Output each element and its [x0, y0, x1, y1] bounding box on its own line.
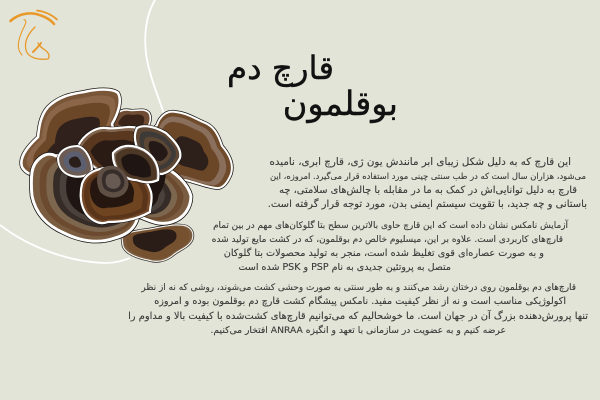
mushroom: bottom lobe [122, 225, 193, 261]
text block: cultivation: تنها پرورش‌دهنده بزرگ آن در جهان است. ما خوشحالیم که می‌توانیم قارچ‌های کشت‌شده با کیفیت بالا و مداوم را [128, 311, 588, 322]
text block: cultivation [128, 283, 588, 336]
title line 1: قارچ دم [227, 49, 334, 87]
text block: cultivation: اکولوژیکی مناسب است و نه از نظر کیفیت مفید. نامکس پیشگام کشت قارچ دم بوقلمون بوده و امروزه [154, 296, 566, 307]
text block: cultivation: قارچ‌های دم بوقلمون روی درختان رشد می‌کنند و به طور سنتی به صورت وحشی کشت می‌شوند، روشی که نه از نظر [141, 283, 576, 293]
text block: cultivation: عرضه کنیم و به عضویت در سازمانی با تعهد و انگیزه ANRAA افتخار می‌کنیم. [211, 325, 506, 336]
text block: introduction [268, 156, 587, 210]
text block: research: قارچ‌های کاربردی است. علاوه بر این، میسلیوم خالص دم بوقلمون، که در کشت مایع تولید شده [212, 235, 563, 245]
mushroom: right lobe [148, 112, 232, 188]
mushroom: upper left lobe [21, 90, 120, 178]
text block: research: آزمایش نامکس نشان داده است که این قارچ حاوی بالاترین سطح بتا گلوکان‌های مهم در بین تمام [213, 221, 568, 231]
text block: introduction: می‌شود، هزاران سال است که در طب سنتی چینی مورد استفاده قرار می‌گیرد. امروزه، این [270, 171, 586, 181]
logo: orange mushroom [9, 10, 58, 60]
text block: introduction: این قارچ که به دلیل شکل زیبای ابر مانندش یون ژی، قارچ ابری، نامیده [270, 156, 571, 168]
text block: research: و به صورت عصاره‌ای قوی تغلیظ شده است، منجر به تولید محصولات بتا گلوکان [224, 248, 544, 259]
text block: introduction: قارچ به دلیل توانایی‌اش در کمک به ما در مقابله با چالش‌های سلامتی، چه [279, 185, 577, 196]
text block: research: متصل به پروتئین جدیدی به نام PSP و PSK شده است [239, 262, 451, 273]
title [227, 49, 398, 124]
title line 2: بوقلمون [283, 84, 398, 123]
text block: introduction: باستانی و چه جدید، با تقویت سیستم ایمنی بدن، مورد توجه قرار گرفته است. [268, 199, 587, 210]
mushroom: large lower lobe [31, 152, 191, 241]
mushroom: top lobe [110, 110, 150, 132]
text block: research [212, 219, 568, 273]
mushroom: central rosette [58, 126, 180, 223]
